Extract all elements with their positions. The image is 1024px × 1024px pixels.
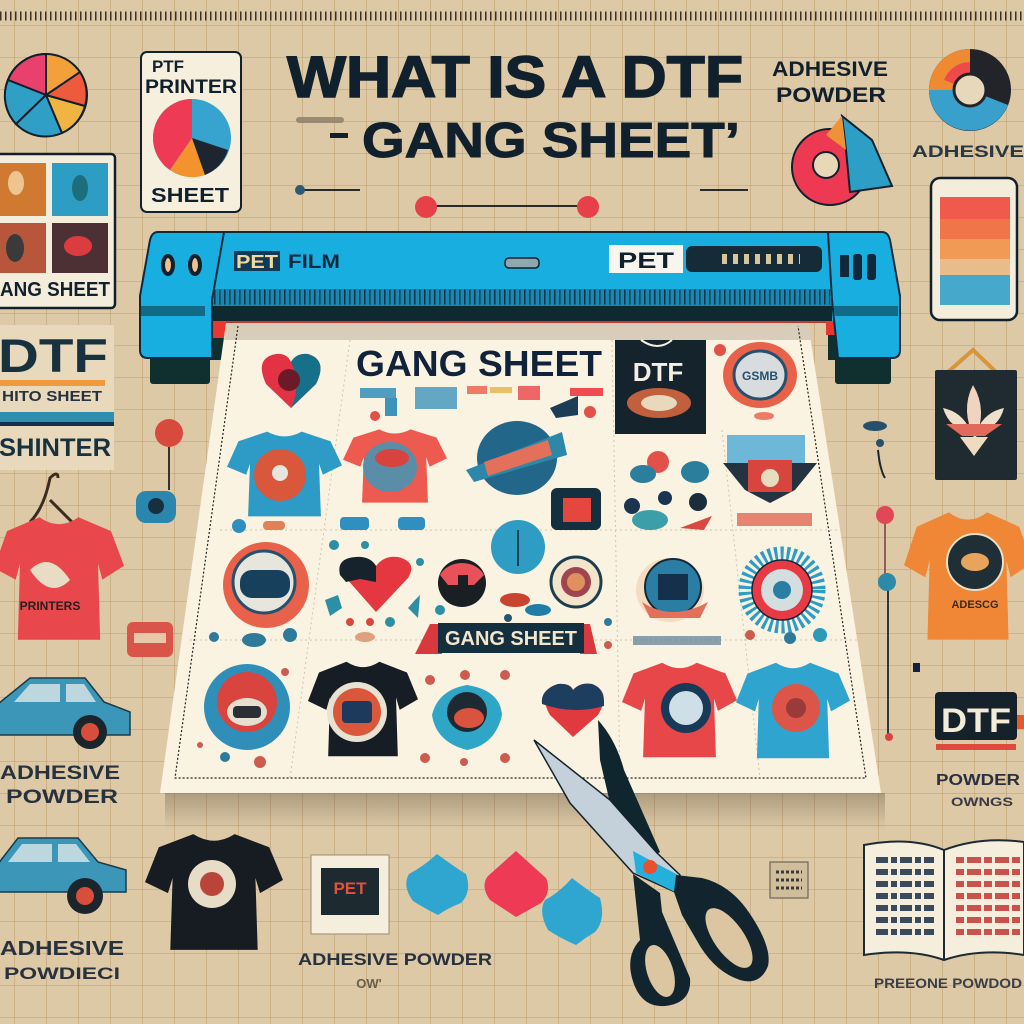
badge top right: GSMB <box>742 369 778 383</box>
panel: gang sheet film <box>160 323 881 793</box>
panel: PTF printer sheet card <box>141 52 241 212</box>
small red heart <box>542 684 604 737</box>
panel: PTF printer sheet card: PTF <box>152 57 184 76</box>
connector with red dots <box>295 185 748 218</box>
small chip <box>770 862 808 898</box>
DTF shirt tile <box>615 340 706 434</box>
big red heart <box>339 557 411 612</box>
ruler at top edge <box>0 12 1024 20</box>
printer feet <box>150 290 891 384</box>
scissors dark blade <box>598 720 660 865</box>
label: adhesive powdiei left: ADHESIVE <box>0 938 124 960</box>
DTF label right: POWDER <box>936 772 1021 789</box>
pills under shirts <box>232 517 425 533</box>
DTF label right <box>935 692 1024 809</box>
shirt: red <box>343 429 447 503</box>
shirt black bottom <box>145 834 283 950</box>
PET tile <box>311 855 389 934</box>
icon: colour wheel top left <box>5 54 87 136</box>
label: adhesive powder top <box>772 58 888 107</box>
pin line right <box>863 421 920 741</box>
panel: DTF label stack left: HITO SHEET <box>2 388 102 405</box>
label: adhesive powder left: POWDER <box>6 787 118 808</box>
panel: DTF label stack left: DTF <box>0 329 108 382</box>
motif cluster <box>624 451 712 530</box>
icon: disc top right <box>929 49 1011 131</box>
shirt on hanger right top <box>935 350 1017 480</box>
scissors lower handle <box>630 874 690 1006</box>
shirt orange right <box>904 512 1024 640</box>
PET FILM label: PET <box>236 252 278 272</box>
printer right cap <box>828 232 900 358</box>
shirt: blue 2 <box>736 663 850 758</box>
ribbon: gang sheet <box>415 623 597 654</box>
label: preseve powder: PREEONE POWDOD <box>874 975 1022 991</box>
badge: winged red <box>723 435 817 503</box>
PET FILM label <box>234 251 340 273</box>
PET label <box>609 245 683 273</box>
icon: dark tile <box>551 488 601 530</box>
icon: heart <box>262 354 320 408</box>
burst badge row 3 <box>204 664 290 750</box>
open book <box>864 840 1024 960</box>
badge row 2 centre right <box>636 558 708 622</box>
concentric badge <box>551 557 601 607</box>
panel: printer <box>140 232 900 384</box>
panel: gang sheet photo card <box>0 154 115 308</box>
shadow below sheet <box>165 793 885 829</box>
badge top right <box>714 342 797 420</box>
label: adhesive powder bottom: OW' <box>356 976 382 991</box>
DTF label right: DTF <box>941 702 1011 740</box>
heading: gang sheet: GANG SHEET <box>356 343 602 384</box>
panel: PTF printer sheet card: SHEET <box>151 185 229 207</box>
sticker dots <box>197 618 827 768</box>
title <box>287 45 743 168</box>
title: WHAT IS A DTF <box>287 45 743 110</box>
shirt: red 2 <box>622 663 737 757</box>
small strip <box>737 513 812 526</box>
PET tile: PET <box>333 879 367 898</box>
panel: DTF label stack left: SHINTER <box>0 434 111 462</box>
sunburst badge <box>746 554 818 626</box>
label: adhesive powdiei left <box>0 938 124 983</box>
decorative strip of motifs <box>360 386 603 421</box>
dot pair <box>438 559 486 607</box>
left cap buttons <box>163 256 200 274</box>
printer slot <box>208 289 846 338</box>
badge: centre ribbon <box>466 421 567 495</box>
scissors upper handle <box>674 875 769 981</box>
scattered motifs around heart <box>325 540 445 642</box>
label: adhesive powder bottom: ADHESIVE POWDER <box>298 950 492 969</box>
centre badge <box>505 258 539 268</box>
panel: DTF label stack left <box>0 325 114 470</box>
small motif <box>500 593 551 622</box>
PET FILM label: FILM <box>288 252 340 273</box>
label: adhesive powder bottom <box>298 950 492 991</box>
ribbon: gang sheet: GANG SHEET <box>445 628 577 650</box>
small left icons <box>127 419 183 657</box>
shirt: blue <box>227 432 342 516</box>
control panel <box>686 246 822 272</box>
shirt on hanger left: PRINTERS <box>20 599 80 613</box>
shirt on hanger left <box>0 474 124 640</box>
scissors blue collar <box>633 851 680 892</box>
printer main body <box>212 232 834 322</box>
label: adhesive powder left <box>0 763 120 808</box>
label: adhesive powder left: ADHESIVE <box>0 763 120 784</box>
blue hex badge <box>432 685 502 750</box>
label: adhesive right: ADHESIVE <box>912 142 1024 161</box>
car 2 <box>0 838 126 914</box>
blue clock <box>491 520 545 574</box>
DTF shirt tile: DTF <box>633 357 683 387</box>
small text strip <box>633 636 721 645</box>
icon: red disc with blue wrap <box>792 116 892 205</box>
panel: PTF printer sheet card: PRINTER <box>145 77 237 98</box>
panel: gang sheet photo card: ANG SHEET <box>0 279 110 301</box>
right cap buttons <box>840 254 876 280</box>
DTF label right: OWNGS <box>951 795 1013 809</box>
scissors pivot <box>643 860 657 874</box>
scissors <box>534 720 769 1006</box>
printer left cap <box>140 232 224 358</box>
shirt orange right: ADESCG <box>951 599 999 611</box>
swatches <box>406 851 602 945</box>
icon: handheld swatch device <box>931 178 1017 320</box>
PET label: PET <box>618 248 675 273</box>
scissors light blade <box>534 740 680 892</box>
badge row 2 left <box>223 542 309 628</box>
shirt: black <box>308 662 418 756</box>
car 1 <box>0 678 130 749</box>
label: adhesive powdiei left: POWDIECI <box>4 964 120 983</box>
label: adhesive powder top: ADHESIVE <box>772 58 888 81</box>
title: GANG SHEET’ <box>362 114 740 168</box>
label: adhesive powder top: POWDER <box>776 84 886 107</box>
